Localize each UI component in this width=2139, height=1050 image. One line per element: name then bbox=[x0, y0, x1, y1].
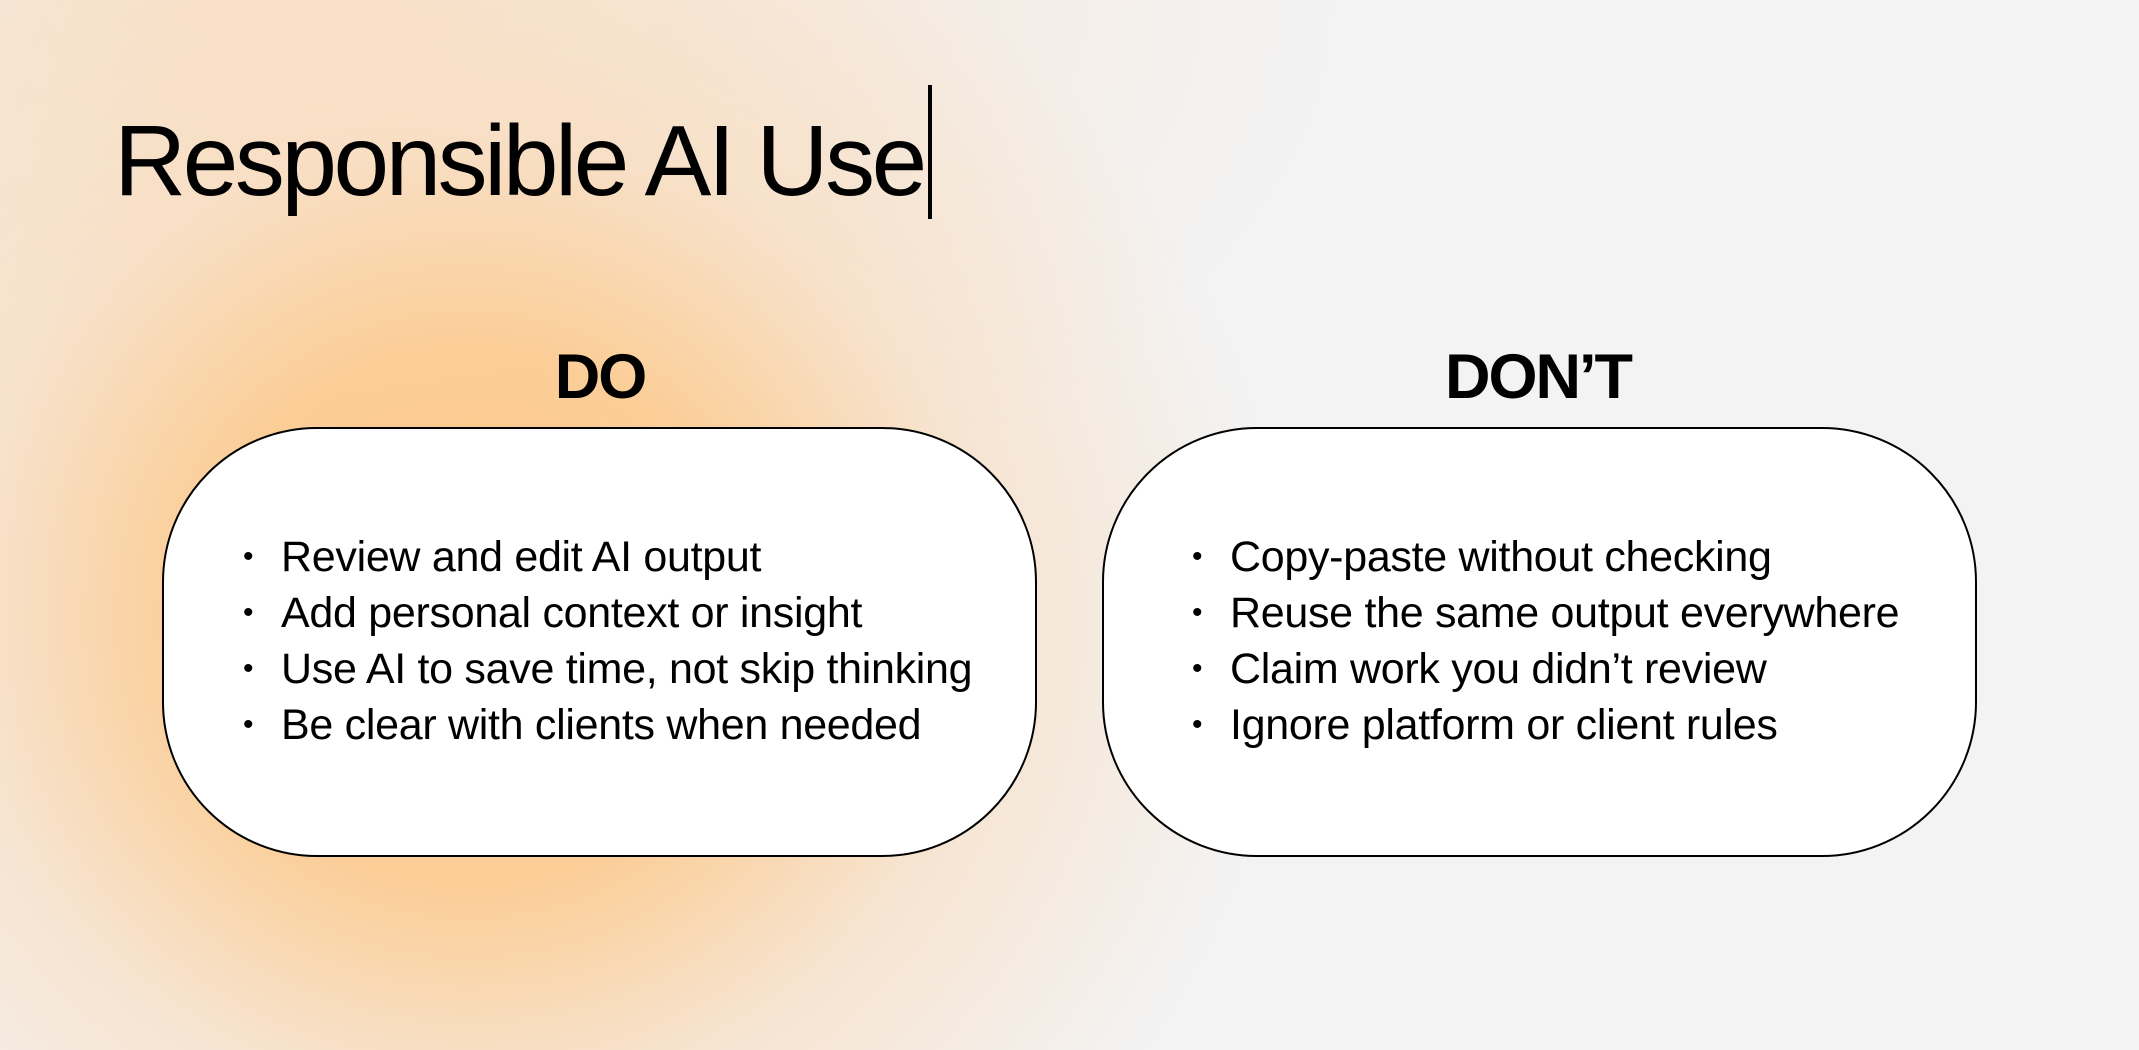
heading: DO: DO bbox=[555, 342, 645, 412]
do list: Use AI to save time, not skip thinking bbox=[281, 645, 972, 693]
text cursor bbox=[928, 85, 932, 219]
title: Responsible AI Use bbox=[114, 105, 924, 217]
do list bbox=[244, 533, 972, 749]
don't list: Copy-paste without checking bbox=[1230, 533, 1772, 581]
don't list: Reuse the same output everywhere bbox=[1230, 589, 1899, 637]
don't list bbox=[1193, 533, 1899, 749]
do list: Add personal context or insight bbox=[281, 589, 862, 637]
panel: do bbox=[162, 427, 1037, 857]
panel: don't bbox=[1102, 427, 1977, 857]
heading: DON'T: DON’T bbox=[1445, 342, 1631, 412]
do list: Review and edit AI output bbox=[281, 533, 761, 581]
don't list: Ignore platform or client rules bbox=[1230, 701, 1778, 749]
don't list: Claim work you didn’t review bbox=[1230, 645, 1766, 693]
do list: Be clear with clients when needed bbox=[281, 701, 921, 749]
